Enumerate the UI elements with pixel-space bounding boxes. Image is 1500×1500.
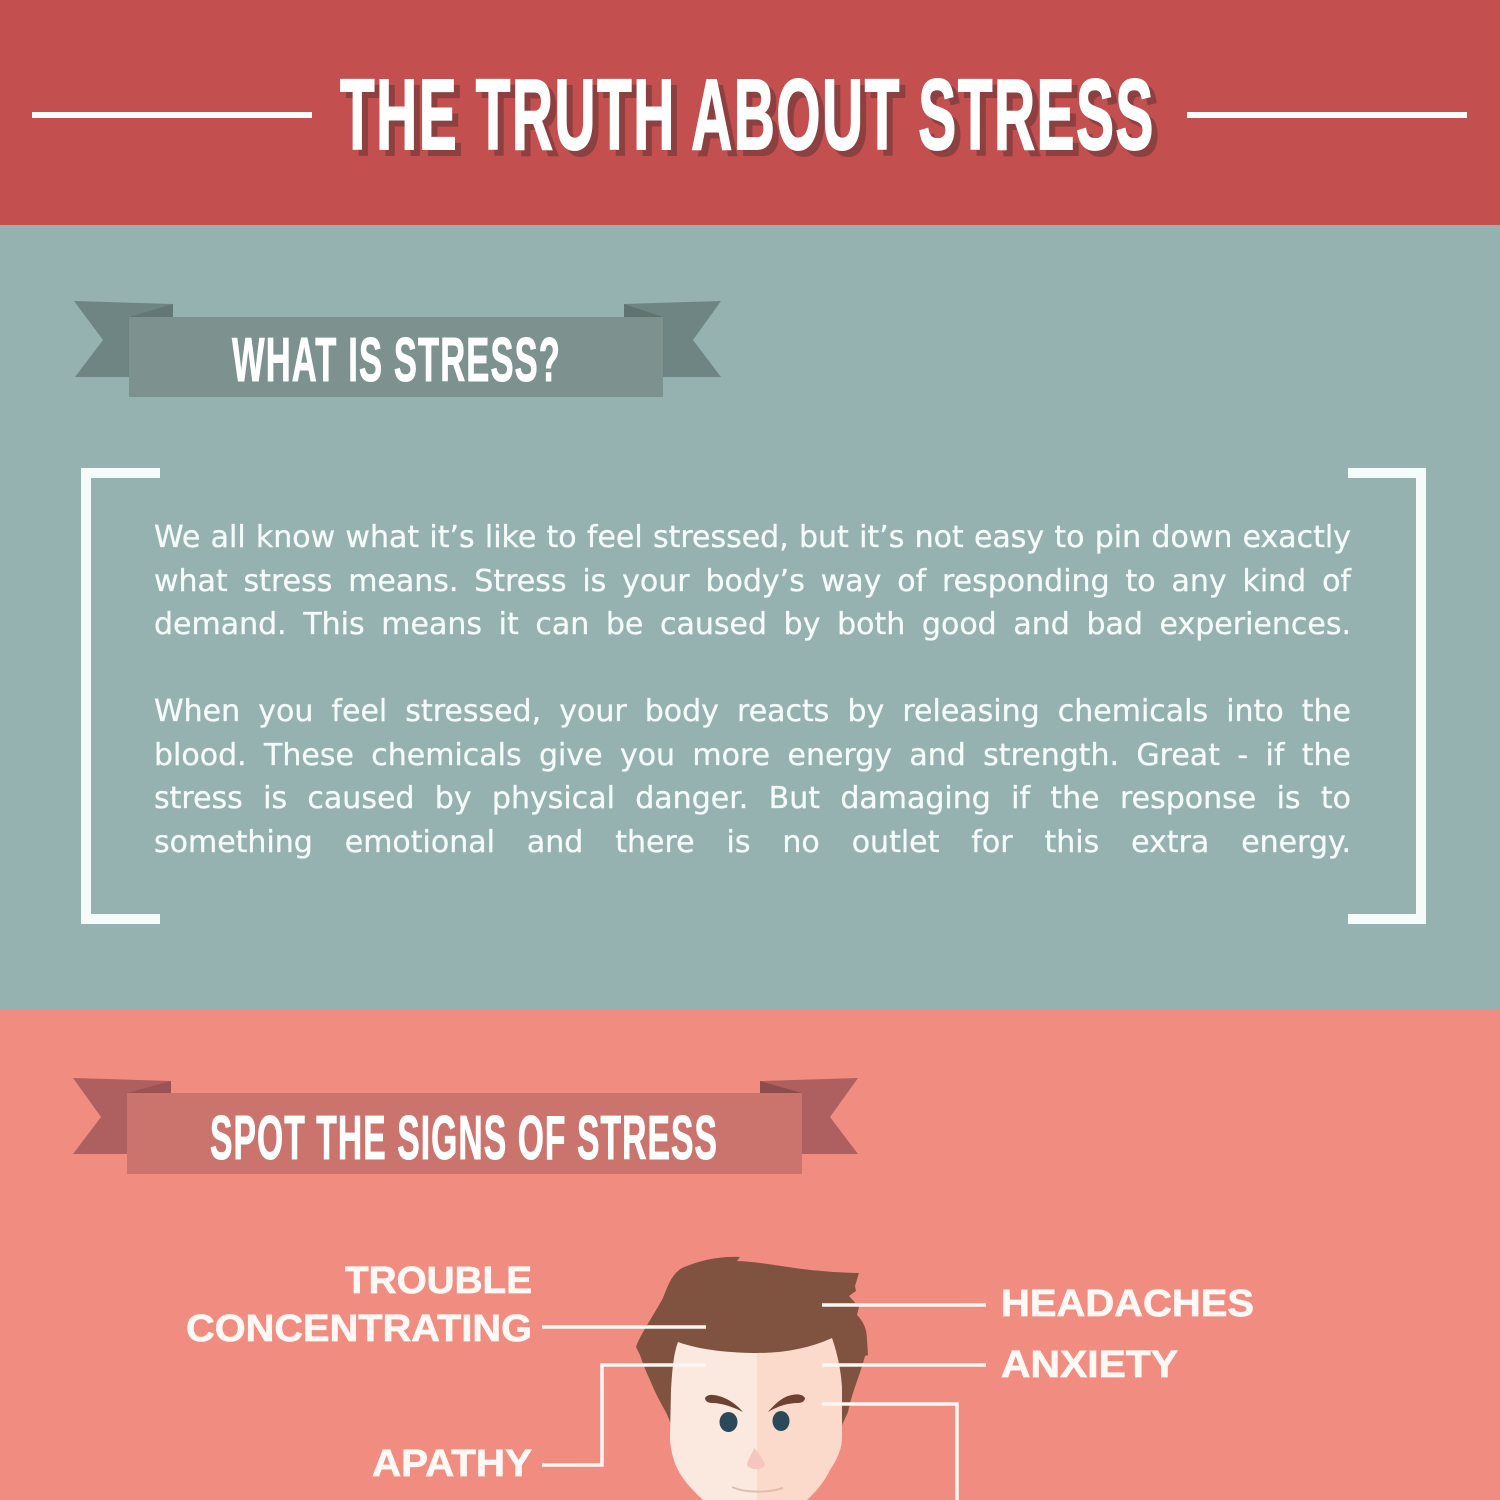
face — [670, 1342, 757, 1500]
eyebrows — [705, 1395, 743, 1412]
ribbon: what is stress — [74, 301, 721, 397]
callout lines — [542, 1305, 986, 1500]
paragraph: body reaction: When you feel stressed, your body reacts by releasing chemicals into the — [154, 694, 1351, 729]
ribbon: spot the signs: SPOT THE SIGNS OF STRESS — [210, 1104, 718, 1173]
paragraph: body reaction: blood. These chemicals give you more energy and strength. Great - if the — [154, 738, 1351, 773]
eyes — [720, 1412, 738, 1432]
nose — [747, 1448, 765, 1469]
paragraph: definition of stress: demand. This means it can be caused by both good and bad experiences. — [154, 607, 1351, 642]
ribbon: what is stress: WHAT IS STRESS? — [232, 326, 561, 395]
paragraph: definition of stress: We all know what it’s like to feel stressed, but it’s not easy to pin down exactly — [154, 520, 1351, 555]
paragraph: body reaction — [154, 694, 1351, 860]
label: trouble concentrating: TROUBLE — [345, 1260, 532, 1302]
ribbon: spot the signs — [73, 1078, 858, 1174]
mouth — [732, 1487, 783, 1492]
paragraph: body reaction: something emotional and there is no outlet for this extra energy. — [154, 825, 1351, 860]
paragraph: definition of stress: what stress means. Stress is your body’s way of responding to any kind of — [154, 564, 1351, 599]
label: headaches: HEADACHES — [1001, 1283, 1254, 1325]
hair — [636, 1257, 868, 1425]
label: trouble concentrating: CONCENTRATING — [186, 1308, 532, 1350]
label: trouble concentrating — [186, 1260, 532, 1350]
label: apathy: APATHY — [372, 1443, 532, 1485]
paragraph: definition of stress — [154, 520, 1352, 642]
head illustration — [636, 1257, 868, 1500]
text brackets — [86, 473, 1421, 919]
paragraph: body reaction: stress is caused by physical danger. But damaging if the response is to — [154, 781, 1351, 816]
label: anxiety: ANXIETY — [1001, 1344, 1178, 1386]
